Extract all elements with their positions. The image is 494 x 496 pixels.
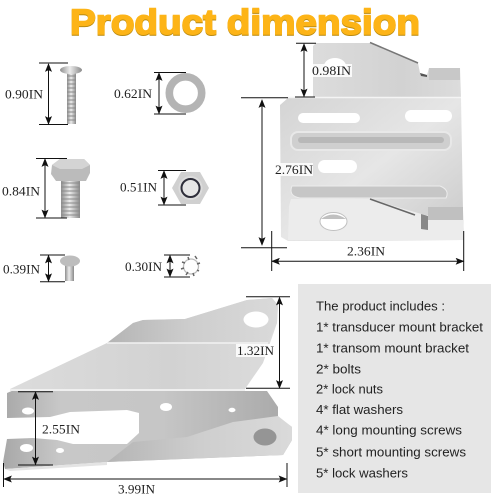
title: Product dimension (70, 4, 420, 43)
panel: product includes: The product includes : (316, 300, 445, 314)
short mounting screw with 0.39IN dimension (3, 255, 80, 282)
title: Product dimension (70, 3, 420, 42)
panel: product includes: 2* bolts (316, 362, 361, 376)
bracket dimensions (0.98IN, 2.76IN, 2.36IN): 2.36IN (347, 244, 385, 258)
panel: product includes: 1* transducer mount bracket (316, 321, 484, 335)
transom mount bracket (lower left) (3, 298, 292, 471)
panel: product includes: 5* short mounting screws (316, 446, 466, 460)
short mounting screw with 0.39IN dimension: 0.39IN (3, 262, 40, 276)
transom bracket dimensions (1.32IN, 2.55IN, 3.99IN): 2.55IN (42, 422, 80, 436)
transom bracket dimensions (1.32IN, 2.55IN, 3.99IN) (4, 297, 290, 496)
hex bolt with 0.84IN dimension: 0.84IN (2, 184, 40, 198)
flat washer with 0.62IN dimension (114, 72, 202, 114)
panel: product includes: 4* flat washers (316, 403, 403, 417)
transom bracket dimensions (1.32IN, 2.55IN, 3.99IN): 1.32IN (237, 344, 274, 358)
lock nut with 0.51IN dimension: 0.51IN (120, 180, 157, 194)
panel: product includes: 1* transom mount bracket (316, 342, 470, 356)
hex bolt with 0.84IN dimension (2, 158, 90, 218)
panel: product includes: 5* lock washers (316, 467, 408, 481)
panel: product includes: 2* lock nuts (316, 383, 383, 397)
long mounting screw with 0.90IN dimension: 0.90IN (5, 88, 43, 102)
lock washer with 0.30IN dimension (125, 255, 200, 277)
panel: product includes: 4* long mounting screws (316, 423, 462, 437)
bracket dimensions (0.98IN, 2.76IN, 2.36IN): 2.76IN (275, 163, 313, 177)
bracket dimensions (0.98IN, 2.76IN, 2.36IN) (241, 43, 464, 271)
long mounting screw with 0.90IN dimension (5, 63, 82, 124)
bracket dimensions (0.98IN, 2.76IN, 2.36IN): 0.98IN (312, 64, 351, 78)
flat washer with 0.62IN dimension: 0.62IN (114, 87, 152, 101)
lock nut with 0.51IN dimension (120, 170, 209, 205)
panel: product includes (298, 284, 491, 493)
transducer mount bracket (upper right) (280, 42, 464, 241)
lock washer with 0.30IN dimension: 0.30IN (125, 260, 162, 274)
